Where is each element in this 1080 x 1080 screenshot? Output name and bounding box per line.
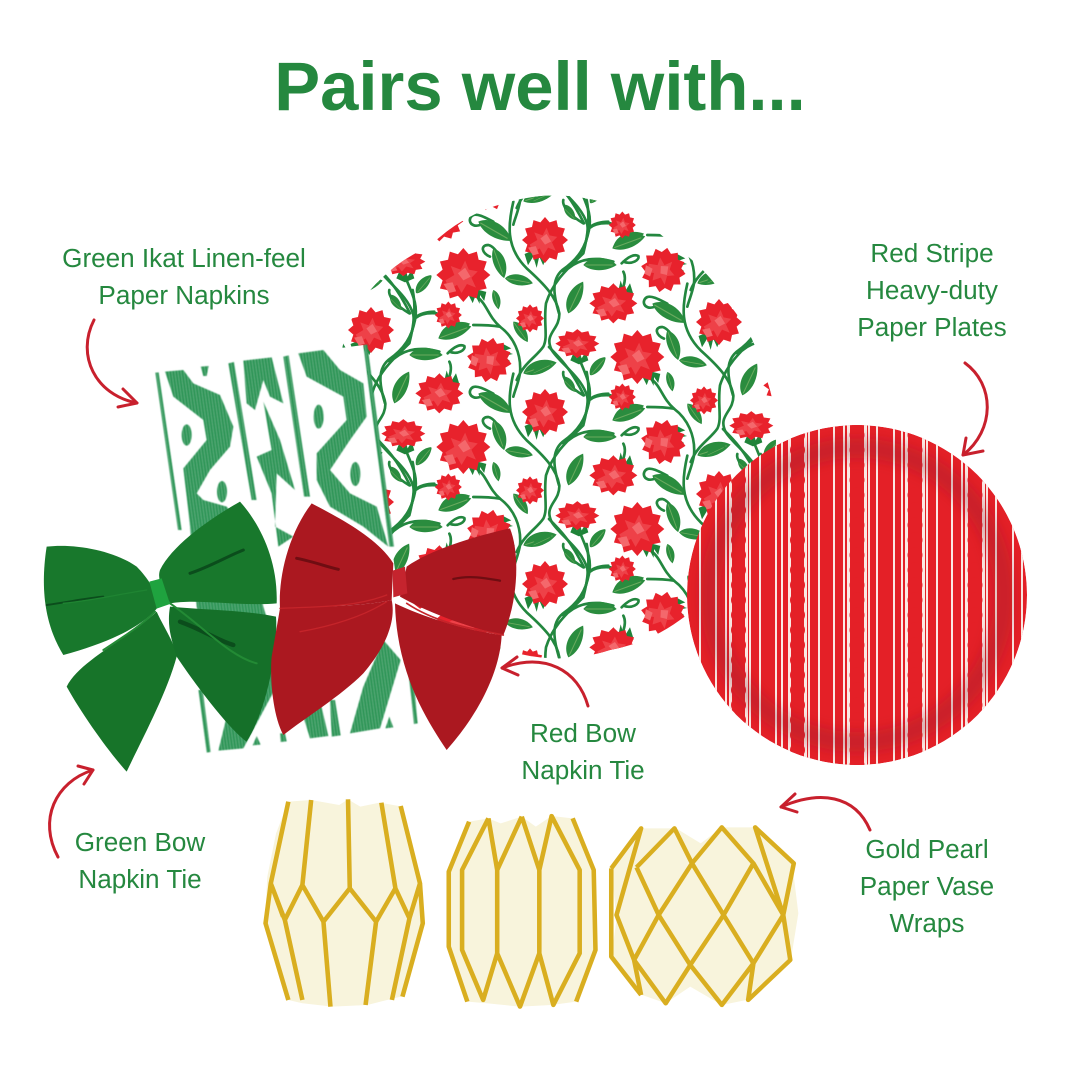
label: red stripe plates: Red Stripe — [870, 238, 994, 268]
gold pearl vase wrap 1 — [265, 799, 423, 1007]
label: red bow: Red Bow — [530, 718, 636, 748]
label: gold vase wraps: Paper Vase — [860, 871, 994, 901]
arrow: to vases — [781, 794, 870, 830]
label: green ikat napkins — [62, 243, 306, 310]
arrow: to red bow — [502, 657, 588, 706]
gold pearl vase wrap 3 — [611, 827, 798, 1005]
label: green ikat napkins: Green Ikat Linen-feel — [62, 243, 306, 273]
label: gold vase wraps: Wraps — [890, 908, 964, 938]
ikat napkin — [155, 345, 418, 753]
label: red stripe plates: Heavy-duty — [866, 275, 998, 305]
label: gold vase wraps — [860, 834, 994, 938]
arrow: to napkins — [87, 320, 137, 407]
label: green bow: Green Bow — [75, 827, 205, 857]
label: red bow — [521, 718, 645, 785]
green velvet bow — [44, 502, 277, 772]
label: red stripe plates — [857, 238, 1007, 342]
red stripe paper plate — [687, 420, 1027, 770]
arrow: to green bow — [50, 766, 93, 857]
label: gold vase wraps: Gold Pearl — [865, 834, 989, 864]
label: green ikat napkins: Paper Napkins — [98, 280, 270, 310]
title: Pairs well with... — [274, 48, 806, 125]
label: green bow: Napkin Tie — [78, 864, 202, 894]
label: red bow: Napkin Tie — [521, 755, 645, 785]
gold pearl vase wrap 2 — [449, 816, 595, 1007]
red velvet bow — [271, 503, 516, 750]
label: red stripe plates: Paper Plates — [857, 312, 1007, 342]
floral scalloped plate — [182, 28, 994, 877]
arrow: to plate — [963, 363, 987, 455]
label: green bow — [75, 827, 205, 894]
